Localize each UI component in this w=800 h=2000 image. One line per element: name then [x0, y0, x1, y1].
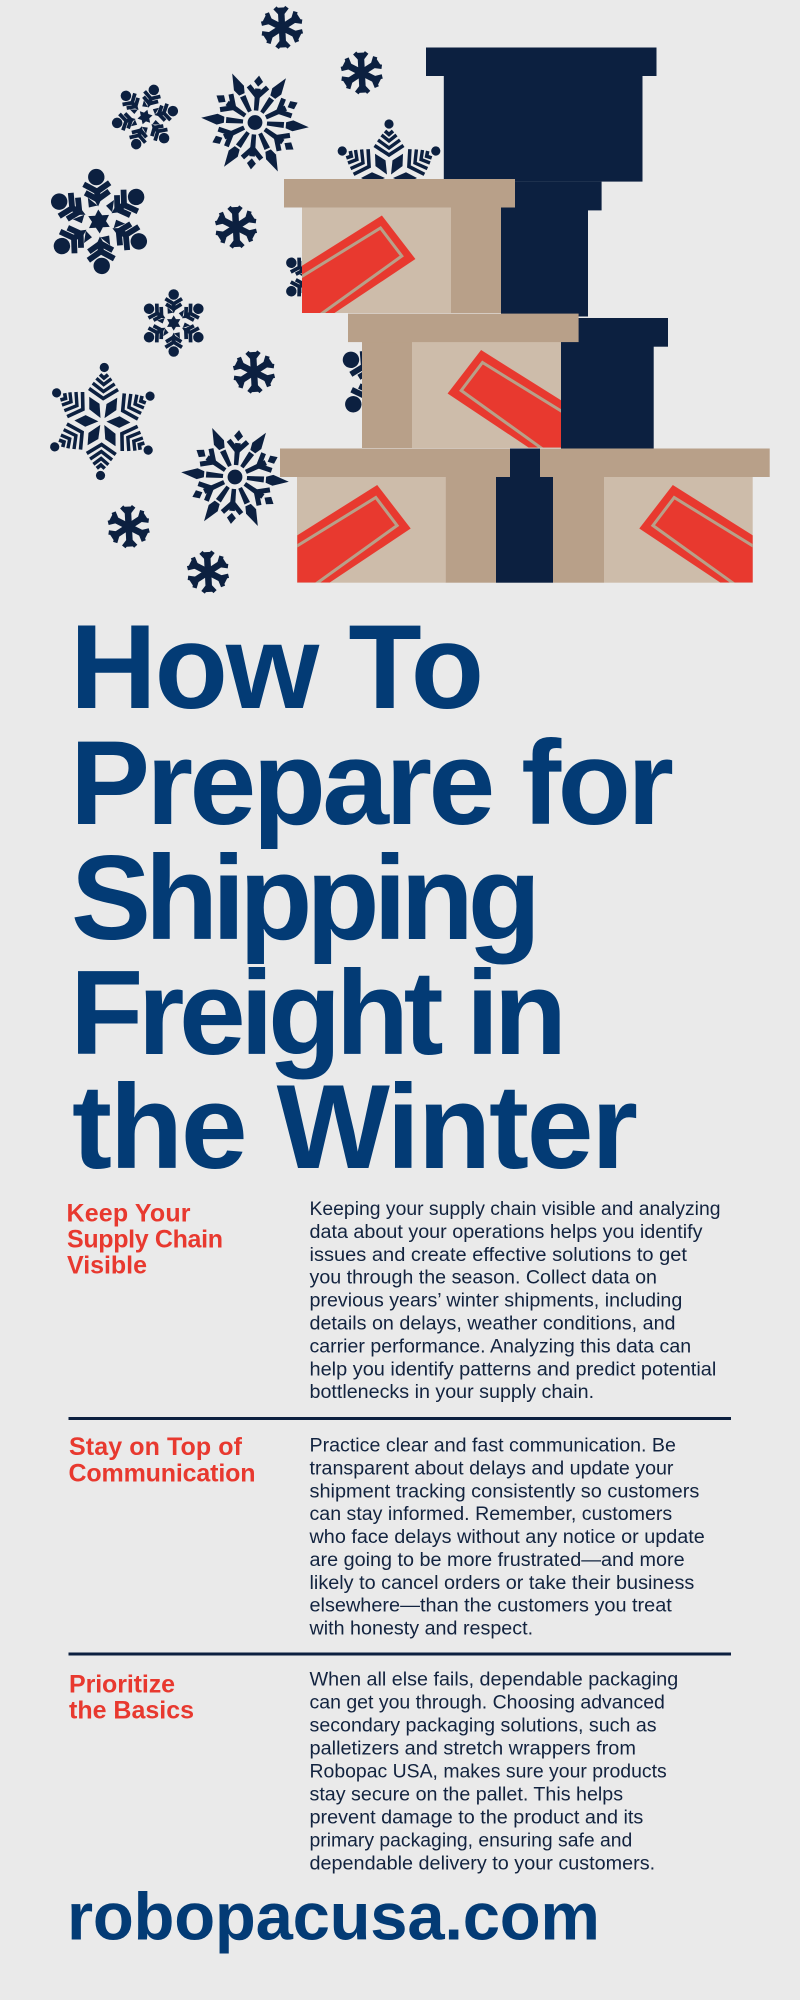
title: Prepare for: [70, 716, 674, 850]
section body: basics: secondary packaging solutions, such as: [310, 1716, 657, 1737]
section body: communication: can stay informed. Remember, customers: [310, 1504, 672, 1525]
tan box upper: [262, 179, 515, 340]
section body: communication: Practice clear and fast communication. Be: [310, 1436, 676, 1457]
shipping label: [639, 485, 793, 610]
title: Freight in: [70, 946, 567, 1080]
shipping label: [262, 216, 415, 340]
section body: supply chain: previous years’ winter shipments, including: [310, 1291, 682, 1312]
snowflake 13: [40, 361, 165, 482]
section body: supply chain: issues and create effective solutions to get: [310, 1245, 688, 1266]
section heading: keep your supply chain visible: [66, 1200, 223, 1280]
section body: basics: When all else fails, dependable packaging: [310, 1670, 678, 1691]
snowflakes: [40, 6, 449, 593]
website url: robopacusa.com: [67, 1879, 600, 1954]
section body: communication: likely to cancel orders or take their business: [310, 1573, 694, 1594]
snowflake 12: [192, 65, 318, 180]
snowflake over box: [172, 420, 298, 534]
snowflake 3: [215, 206, 257, 248]
snowflake 11: [334, 325, 447, 435]
section heading: prioritize the basics: the Basics: [69, 1696, 194, 1724]
section body: basics: palletizers and stretch wrappers from: [310, 1738, 636, 1760]
navy box top: [426, 48, 656, 182]
snowflake 4: [233, 351, 275, 393]
shipping label: [257, 485, 411, 610]
navy box bottom: [496, 448, 553, 583]
tan box bottom right: [540, 448, 793, 610]
section body: communication: are going to be more frustrated—and more: [310, 1550, 685, 1571]
title: [70, 600, 674, 1194]
section body: supply chain: details on delays, weather conditions, and: [310, 1314, 676, 1334]
section body: supply chain: carrier performance. Analyzing this data can: [310, 1336, 691, 1357]
navy box third: [560, 318, 668, 448]
section body: communication: [308, 1436, 705, 1640]
section heading: stay on top of communication: Communication: [68, 1459, 256, 1487]
section body: communication: elsewhere—than the customers you treat: [310, 1596, 673, 1617]
section body: communication: who face delays without any notice or update: [308, 1527, 705, 1548]
section body: basics: [310, 1670, 678, 1874]
section body: basics: can get you through. Choosing advanced: [310, 1693, 665, 1714]
section heading: prioritize the basics: Prioritize: [69, 1670, 175, 1698]
section body: basics: dependable delivery to your customers.: [310, 1853, 655, 1874]
section body: supply chain: Keeping your supply chain visible and analyzing: [310, 1199, 720, 1220]
snowflake 6: [187, 551, 229, 593]
title: the Winter: [72, 1060, 638, 1194]
section heading: prioritize the basics: [69, 1670, 194, 1724]
section body: communication: shipment tracking consistently so customers: [310, 1481, 699, 1502]
section heading: keep your supply chain visible: Visible: [67, 1252, 147, 1280]
section heading: keep your supply chain visible: Supply Chain: [67, 1226, 223, 1254]
snowflake 10: [281, 243, 351, 311]
title: Shipping: [71, 831, 541, 965]
section heading: keep your supply chain visible: Keep Your: [66, 1200, 191, 1228]
section body: basics: primary packaging, ensuring safe and: [310, 1830, 632, 1851]
section body: communication: transparent about delays and update your: [310, 1458, 674, 1480]
section body: basics: stay secure on the pallet. This helps: [310, 1784, 623, 1805]
section body: supply chain: bottlenecks in your supply chain.: [310, 1382, 594, 1403]
section heading: stay on top of communication: Stay on Top of: [69, 1433, 243, 1461]
tan box bottom left: [257, 448, 510, 610]
tan box middle: [348, 314, 601, 474]
section heading: stay on top of communication: [68, 1433, 256, 1487]
section body: communication: with honesty and respect.: [308, 1618, 533, 1640]
snowflake 7: [42, 166, 156, 277]
section body: basics: Robopac USA, makes sure your products: [310, 1762, 667, 1782]
snowflake 8: [102, 74, 188, 160]
snowflake 1: [261, 6, 303, 49]
navy box second: [500, 182, 602, 316]
box stack: [257, 48, 793, 610]
section body: basics: prevent damage to the product and its: [310, 1807, 643, 1828]
section body: supply chain: [310, 1199, 720, 1403]
section body: supply chain: help you identify patterns and predict potential: [310, 1359, 716, 1380]
snowflake 2: [340, 52, 383, 94]
snowflake 5: [107, 506, 150, 548]
title: How To: [70, 600, 484, 734]
section body: supply chain: data about your operations helps you identify: [310, 1222, 703, 1243]
section body: supply chain: you through the season. Collect data on: [310, 1268, 657, 1289]
snowflake 9: [139, 289, 208, 357]
shipping label: [448, 350, 601, 474]
snowflake 14: [329, 119, 449, 237]
